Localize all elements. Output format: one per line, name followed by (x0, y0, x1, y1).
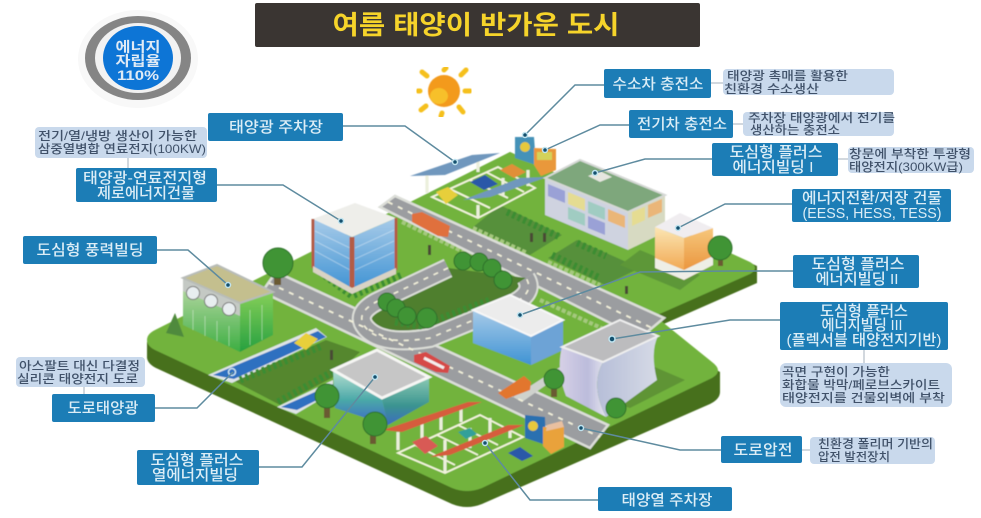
badge: energy self-sufficiency 110%: 110% (117, 67, 160, 83)
label: solar thermal parking: 태양열 주차장 (622, 492, 713, 509)
platform base (147, 152, 757, 507)
note: asphalt (16, 357, 145, 387)
note: fuel cell (35, 127, 207, 158)
building: energy storage (655, 213, 713, 280)
vehicles (294, 212, 531, 399)
note: plus energy I: 창문에 부착한 투광형 (849, 146, 971, 161)
parking lot: solar panels (410, 153, 547, 218)
note: EV: 주차장 태양광에서 전기를 (748, 110, 895, 125)
note: fuel cell: 전기/열/냉방 생산이 가능한 (38, 129, 197, 143)
note: hydrogen (723, 68, 894, 96)
note: plus energy I: 태양전지(300KW급) (849, 159, 963, 174)
label: plus energy III: (플렉서블 태양전지기반) (786, 332, 942, 349)
label: solar road (52, 394, 155, 422)
label: energy storage (792, 189, 951, 222)
note: asphalt: 실리콘 태양전지 도로 (17, 371, 138, 386)
label: plus energy III (780, 302, 948, 350)
title banner (255, 3, 700, 47)
label: plus energy III: 에너지빌딩 III (822, 317, 902, 334)
note: piezo (810, 437, 935, 464)
building: plus energy III curved facade (560, 320, 658, 417)
label: thermal plus energy (137, 450, 259, 485)
hedges and pebbles (296, 212, 610, 332)
note: piezo: 친환경 폴리머 기반의 (818, 437, 933, 451)
building: wind power (183, 265, 273, 352)
building: zero energy (313, 203, 396, 294)
label: plus energy II (793, 255, 919, 288)
label: wind building (23, 236, 157, 264)
roads (262, 196, 664, 448)
note: EV (743, 110, 895, 137)
solar road (208, 328, 360, 414)
label: EV charger (629, 110, 733, 138)
label: solar thermal parking (598, 487, 732, 511)
label: solar parking: 태양광 주차장 (229, 119, 323, 136)
label: zero energy building (76, 168, 217, 202)
icon: sun (418, 68, 470, 116)
trees (166, 236, 732, 444)
label: plus energy III: 도심형 플러스 (820, 303, 908, 320)
icon: hydrogen and EV chargers (upper) (515, 137, 556, 176)
label: zero energy building: 태양광-연료전지형 (83, 170, 207, 187)
pedestrians (330, 233, 628, 360)
title banner: 여름 태양이 반가운 도시 (332, 10, 620, 40)
note: curved solar: 태양전지를 건물외벽에 부착 (782, 390, 945, 405)
label: energy storage: (EESS, HESS, TESS) (802, 205, 942, 222)
note: plus energy I (848, 146, 974, 174)
label: energy storage: 에너지전환/저장 건물 (802, 190, 942, 207)
label: hydrogen charger: 수소차 충전소 (612, 76, 704, 93)
badge: energy self-sufficiency 110%: 자립율 (116, 53, 161, 69)
label: thermal plus energy: 도심형 플러스 (150, 452, 244, 469)
note: hydrogen: 친환경 수소생산 (724, 82, 819, 96)
label: plus energy II: 에너지빌딩 II (816, 271, 898, 288)
city illustration (147, 137, 757, 507)
note: hydrogen: 태양광 촉매를 활용한 (727, 68, 848, 83)
label: road piezo (721, 436, 802, 463)
note: curved solar: 곡면 구현이 가능한 (782, 364, 890, 379)
label: thermal plus energy: 열에너지빌딩 (152, 467, 238, 484)
connector lines (84, 83, 864, 500)
building: plus energy II (473, 295, 563, 365)
label: plus energy I: 에너지빌딩 I (732, 159, 814, 176)
label: EV charger: 전기차 충전소 (637, 116, 727, 133)
label: hydrogen charger (604, 69, 711, 98)
label: plus energy I (712, 143, 838, 176)
note: curved solar (780, 363, 952, 407)
label: wind building: 도심형 풍력빌딩 (36, 242, 144, 259)
label: solar road: 도로태양광 (68, 400, 139, 417)
label: plus energy I: 도심형 플러스 (730, 144, 823, 161)
label: plus energy II: 도심형 플러스 (812, 256, 905, 273)
building: plus energy I (545, 160, 665, 250)
note: curved solar: 화합물 박막/페로브스카이트 (782, 377, 940, 392)
building: thermal energy (333, 350, 429, 425)
note: piezo: 압전 발전장치 (818, 450, 890, 464)
badge: energy self-sufficiency 110%: 에너지 (116, 39, 160, 55)
icon: road chargers (lower) (525, 415, 564, 454)
parking lot: solar thermal (383, 402, 533, 473)
note: fuel cell: 삼중열병합 연료전지(100KW) (38, 141, 206, 156)
badge: energy self-sufficiency 110% (78, 10, 198, 108)
label: road piezo: 도로압전 (734, 442, 792, 459)
note: EV: 생산하는 충전소 (750, 123, 840, 137)
note: asphalt: 아스팔트 대신 다결정 (19, 359, 140, 373)
label: zero energy building: 제로에너지건물 (97, 185, 195, 202)
label: solar parking (208, 113, 343, 141)
